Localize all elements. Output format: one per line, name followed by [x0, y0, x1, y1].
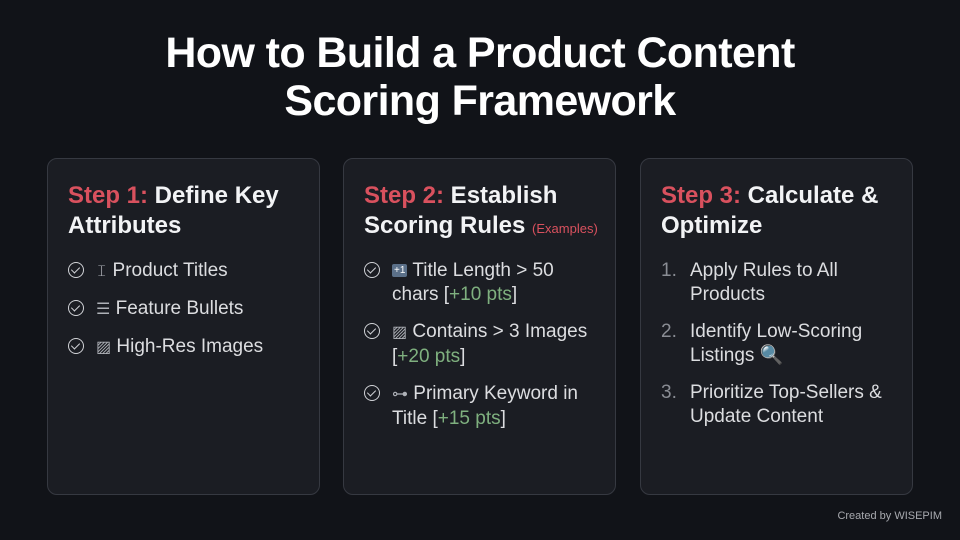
- list: actions: 3.: [661, 382, 677, 403]
- list: attributes: [68, 260, 263, 357]
- title: [165, 29, 795, 125]
- heading: step 3: Step 3: Calculate & Optimize: [661, 182, 878, 239]
- list: attributes: 𝙸 Product Titles: [96, 260, 228, 281]
- list: actions: 1.: [661, 260, 677, 281]
- title: How to Build a Product Content: [165, 29, 795, 77]
- heading: step 1: Step 1: Define Key Attributes: [68, 182, 279, 239]
- list: actions: [661, 260, 882, 427]
- panel: step 3: [640, 158, 913, 495]
- list: rules: ⊶ Primary Keyword in Title [+15 pts]: [392, 383, 578, 429]
- list: rules: chars [+10 pts]: [392, 284, 517, 305]
- list: actions: Prioritize Top-Sellers & Update Content: [690, 382, 882, 427]
- list: actions: Apply Rules to All Products: [690, 260, 838, 305]
- panel: step 2: [343, 158, 616, 495]
- panel: step 1: [47, 158, 320, 495]
- list: attributes: ☰ Feature Bullets: [96, 298, 243, 319]
- list: rules: +1 Title Length > 50: [394, 260, 554, 281]
- footer credit: Created by WISEPIM: [837, 510, 942, 522]
- list: actions: Identify Low-Scoring Listings 🔍: [690, 321, 862, 366]
- list: rules: ▨ Contains > 3 Images [+20 pts]: [392, 321, 587, 367]
- title: Scoring Framework: [284, 77, 676, 125]
- list: actions: 2.: [661, 321, 677, 342]
- list: rules: [364, 260, 587, 429]
- heading: step 2: Step 2: Establish Scoring Rules (Examples): [364, 182, 598, 239]
- list: attributes: ▨ High-Res Images: [96, 336, 263, 357]
